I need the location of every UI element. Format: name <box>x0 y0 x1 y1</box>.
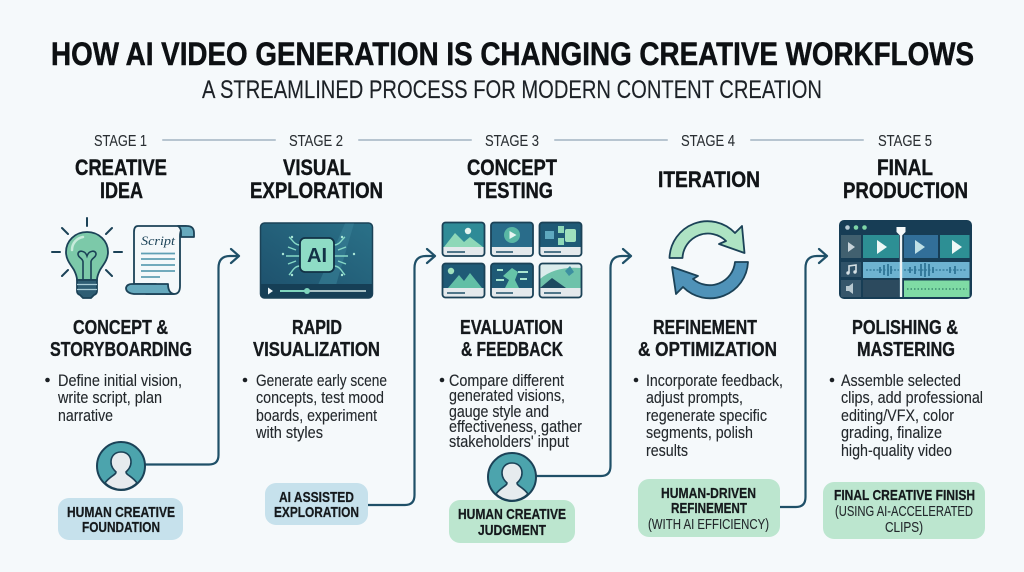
bullet text: stage 5: high-quality video <box>841 442 952 460</box>
subheading: polishing and mastering: MASTERING <box>857 339 955 361</box>
subheading: evaluation and feedback: EVALUATION <box>460 317 563 339</box>
bullet text: stage 2: with styles <box>255 424 323 442</box>
tag: human creative judgment <box>449 500 575 543</box>
tag: human-driven refinement: (WITH AI EFFICIENCY) <box>648 516 769 533</box>
bullet text: stage 5 <box>830 372 983 460</box>
subheading: concept and storyboarding: CONCEPT & <box>73 317 168 339</box>
icon: script scroll <box>126 226 194 294</box>
heading: concept testing <box>467 155 557 203</box>
tag: final creative finish: (USING AI-ACCELERATED <box>835 503 973 520</box>
bullet text: stage 5: editing/VFX, color <box>841 407 954 425</box>
panel: stage 4 iteration <box>634 133 783 537</box>
bullet text: stage 1: narrative <box>58 407 113 425</box>
panel: stage 1 creative idea <box>45 133 194 540</box>
bullet text: stage 5: grading, finalize <box>841 424 942 442</box>
bullet text: stage 1: write script, plan <box>57 389 162 407</box>
subheading: evaluation and feedback <box>460 317 563 361</box>
subheading: rapid visualization <box>253 317 380 361</box>
heading: creative idea: IDEA <box>100 178 143 203</box>
tag: AI assisted exploration: AI ASSISTED <box>279 489 354 506</box>
subheading: refinement and optimization <box>638 317 777 361</box>
heading: final production <box>843 155 968 203</box>
tag: human creative judgment: JUDGMENT <box>478 522 546 539</box>
bullet text: stage 3: stakeholders' input <box>449 433 569 451</box>
subheading: polishing and mastering: POLISHING & <box>852 317 958 339</box>
bullet text: stage 2: concepts, test mood <box>256 389 384 407</box>
subheading: refinement and optimization: & OPTIMIZATION <box>638 339 777 361</box>
icon: human reviewer <box>488 453 536 501</box>
heading: visual exploration: EXPLORATION <box>250 178 383 203</box>
bullet text: stage 3 <box>440 372 582 451</box>
tag: human creative foundation: HUMAN CREATIVE <box>67 504 175 521</box>
bullet text: stage 4: Incorporate feedback, <box>646 372 783 390</box>
bullet text: stage 4: results <box>646 442 688 460</box>
heading: iteration: ITERATION <box>658 167 760 192</box>
subheading: evaluation and feedback: & FEEDBACK <box>461 339 563 361</box>
heading: concept testing: CONCEPT <box>467 155 557 180</box>
bullet text: stage 3: effectiveness, gather <box>449 418 582 436</box>
tag: human creative foundation <box>58 498 183 540</box>
tag: human-driven refinement: REFINEMENT <box>671 500 747 517</box>
subheading: concept and storyboarding <box>50 317 192 361</box>
bullet text: stage 1 <box>45 372 182 425</box>
tag: AI assisted exploration: EXPLORATION <box>274 504 359 521</box>
bullet text: stage 5: Assemble selected <box>841 372 961 390</box>
stage label 2: STAGE 2 <box>289 133 343 150</box>
bullet text: stage 4: segments, polish <box>646 424 753 442</box>
subheading: polishing and mastering <box>852 317 958 361</box>
icon: human creator <box>97 442 145 490</box>
arrow: stage 4 to stage 5 <box>780 249 827 507</box>
bullet text: stage 3: Compare different <box>449 372 564 390</box>
tag: human creative foundation: FOUNDATION <box>82 519 160 536</box>
heading: final production: FINAL <box>877 155 933 180</box>
subheading: rapid visualization: VISUALIZATION <box>253 339 380 361</box>
bullet text: stage 4 <box>634 372 783 460</box>
bullet text: stage 3: generated visions, <box>449 387 565 405</box>
bullet text: stage 2 <box>243 372 387 442</box>
tag: final creative finish: FINAL CREATIVE FINISH <box>834 487 975 504</box>
arrow: stage 2 to stage 3 <box>368 249 435 505</box>
subheading: refinement and optimization: REFINEMENT <box>653 317 757 339</box>
stage label 1: STAGE 1 <box>94 133 147 150</box>
tag: final creative finish: CLIPS) <box>885 519 923 536</box>
bullet text: stage 4: adjust prompts, <box>646 389 743 407</box>
subheading: rapid visualization: RAPID <box>292 317 342 339</box>
tag: final creative finish <box>823 482 985 539</box>
panel: stage 5 final production <box>823 133 985 539</box>
stage label 5: STAGE 5 <box>878 133 932 150</box>
bullet text: stage 2: Generate early scene <box>256 372 387 390</box>
icon: AI video screen: AI <box>307 245 327 267</box>
tag: human-driven refinement <box>638 479 780 537</box>
icon: light bulb <box>52 218 122 298</box>
tag: AI assisted exploration <box>265 483 368 525</box>
stage label 4: STAGE 4 <box>681 133 735 150</box>
heading: concept testing: TESTING <box>474 178 553 203</box>
panel: stage 3 concept testing <box>440 133 582 543</box>
icon: script scroll: Script <box>141 233 175 248</box>
arrow: stage 3 to stage 4 <box>536 249 631 476</box>
bullet text: stage 2: boards, experiment <box>256 407 377 425</box>
tag: human creative judgment: HUMAN CREATIVE <box>458 506 566 523</box>
heading: final production: PRODUCTION <box>843 178 968 203</box>
heading: creative idea <box>75 155 167 203</box>
arrow: stage 1 to stage 2 <box>145 249 239 464</box>
subheading: concept and storyboarding: STORYBOARDING <box>50 339 192 361</box>
icon: video editing timeline <box>839 220 972 299</box>
heading: visual exploration <box>250 155 383 203</box>
panel: stage 2 visual exploration <box>243 133 387 525</box>
icon: grid of generated concept thumbnails <box>442 222 582 298</box>
icon: refresh cycle arrows <box>670 221 748 298</box>
bullet text: stage 4: regenerate specific <box>646 407 767 425</box>
tag: human-driven refinement: HUMAN-DRIVEN <box>661 485 756 502</box>
bullet text: stage 3: gauge style and <box>449 403 549 421</box>
bullet text: stage 5: clips, add professional <box>841 389 983 407</box>
heading: creative idea: CREATIVE <box>75 155 167 180</box>
heading: visual exploration: VISUAL <box>283 155 351 180</box>
bullet text: stage 1: Define initial vision, <box>58 372 182 390</box>
stage label 3: STAGE 3 <box>485 133 539 150</box>
subtitle: A STREAMLINED PROCESS FOR MODERN CONTENT CREATION <box>202 76 822 104</box>
icon: AI video screen <box>260 223 372 298</box>
